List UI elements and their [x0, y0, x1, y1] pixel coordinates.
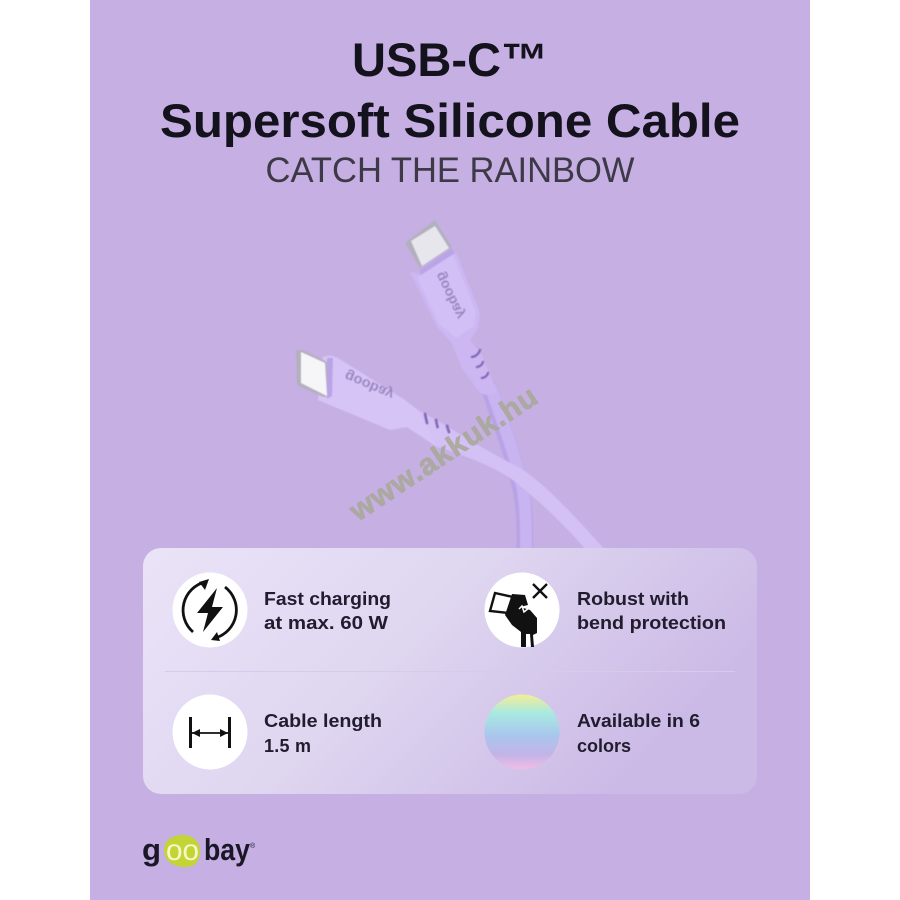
- text: cable length: Cable length: [264, 711, 382, 731]
- icon: length arrow: [172, 694, 248, 770]
- logo: goobay: oo: [166, 834, 199, 867]
- text: colors: colors: [577, 736, 631, 756]
- upper metal plug: [405, 220, 452, 268]
- lower plug mouth: [327, 358, 333, 399]
- lower plug logo: goobay: [342, 368, 396, 403]
- title: Supersoft Silicone Cable: [160, 94, 740, 147]
- text: colors: Available in 6: [577, 711, 700, 731]
- feature: cable length: [172, 694, 382, 770]
- upper plug mouth: [420, 248, 455, 275]
- text: bend protection: bend protection: [577, 613, 726, 633]
- feature: bend protection: [484, 572, 726, 648]
- text: bend protection: [577, 589, 726, 633]
- text: colors: [577, 711, 700, 756]
- logo: goobay: [142, 832, 256, 867]
- text: cable length: [264, 711, 382, 756]
- upper grip notches: [472, 350, 488, 378]
- title: USB-C™: [352, 33, 548, 86]
- upper cable: [405, 220, 526, 550]
- panel: features: [143, 548, 757, 794]
- lower metal plug: [296, 350, 329, 397]
- logo: goobay: g: [142, 832, 161, 867]
- feature: fast charging: [172, 572, 391, 648]
- text: fast charging: at max. 60 W: [264, 613, 388, 633]
- text: bend protection: Robust with: [577, 589, 689, 609]
- icon: bent cable with cross: [484, 572, 560, 648]
- upper plug logo: goobay: [431, 270, 468, 322]
- feature: colors: [484, 694, 700, 770]
- text: cable length: 1.5 m: [264, 736, 311, 756]
- icon: rainbow circle: [484, 694, 560, 770]
- logo: goobay: bay: [204, 832, 251, 867]
- background: [90, 0, 810, 900]
- title: [160, 33, 740, 147]
- icon: lightning with arrows: [172, 572, 248, 648]
- subtitle: CATCH THE RAINBOW: [266, 151, 634, 190]
- watermark: www.akkuk.hu: [343, 380, 544, 528]
- lower cable: [296, 350, 605, 550]
- text: fast charging: Fast charging: [264, 589, 391, 609]
- text: fast charging: [264, 589, 391, 633]
- logo: goobay: ®: [250, 842, 256, 850]
- USB-C cable illustration: [296, 220, 605, 550]
- lower grip notches: [425, 414, 449, 432]
